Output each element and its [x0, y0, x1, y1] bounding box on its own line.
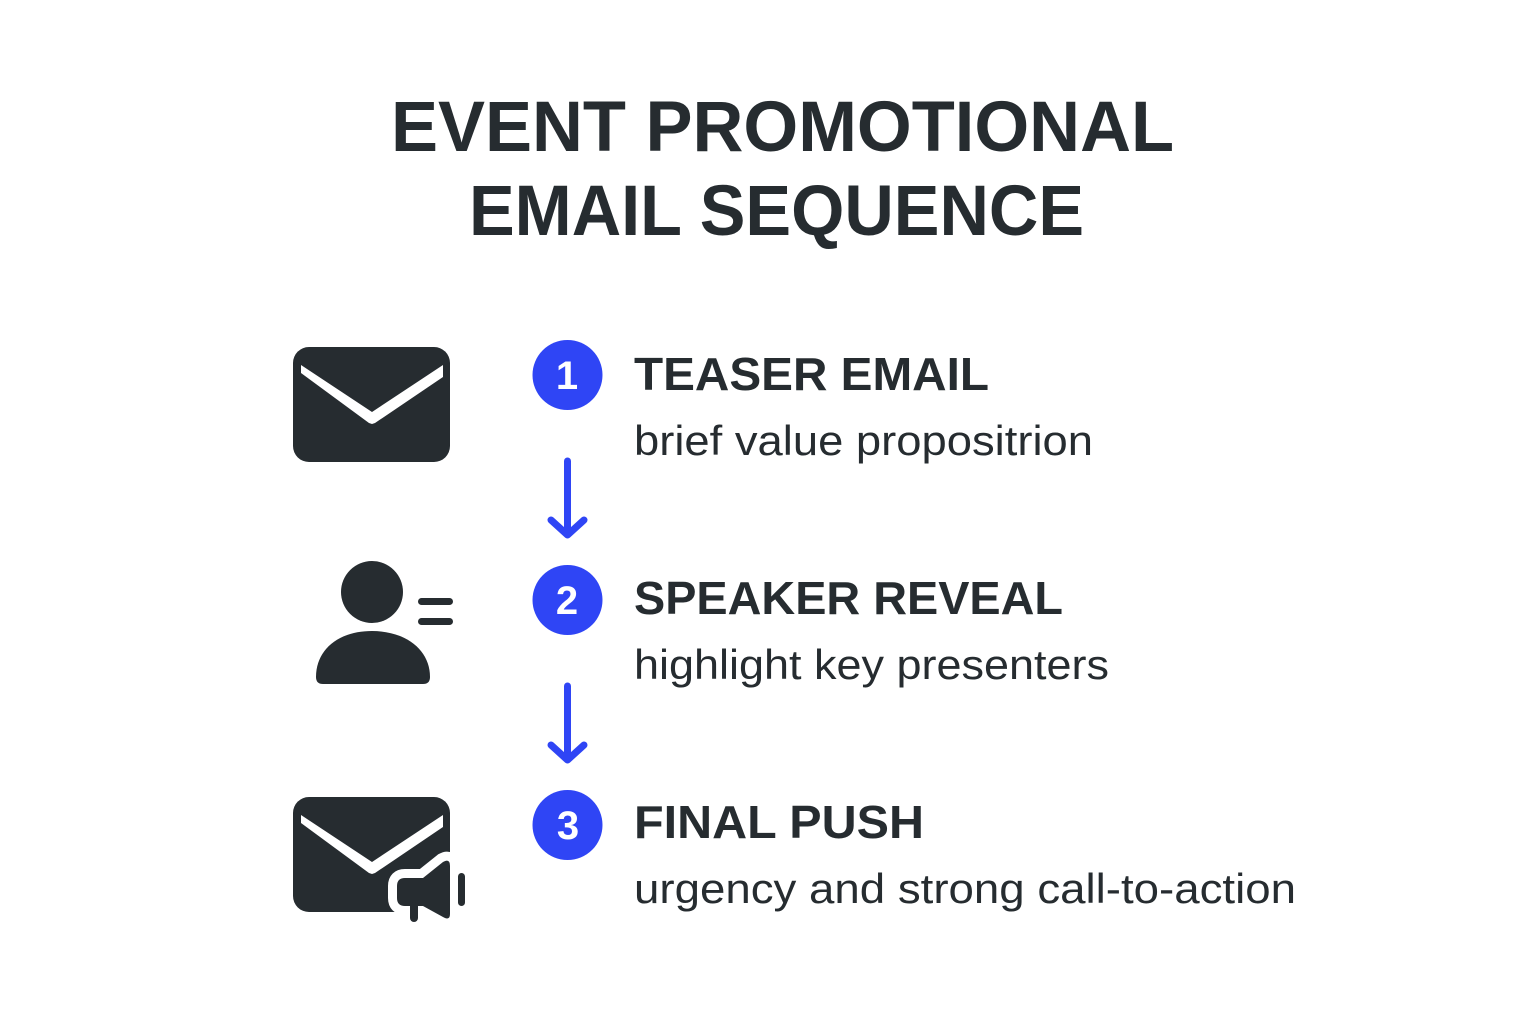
icon: envelope with megaphone: [293, 797, 471, 925]
step 1 heading: TEASER EMAIL: [634, 348, 989, 400]
title: EMAIL SEQUENCE: [469, 172, 1084, 251]
step 3 badge: [532, 790, 602, 860]
step 3 description: urgency and strong call-to-action: [634, 865, 1296, 912]
step 1 badge: [532, 340, 602, 410]
step 2 heading: SPEAKER REVEAL: [634, 572, 1063, 624]
step 3 heading: FINAL PUSH: [634, 796, 924, 848]
arrow: step 2 to step 3: [551, 686, 584, 760]
step 3 badge: 3: [557, 804, 579, 848]
title: EVENT PROMOTIONAL: [391, 88, 1174, 167]
arrow: step 1 to step 2: [551, 461, 584, 535]
step 1 badge: 1: [556, 354, 578, 398]
icon: envelope: [293, 347, 450, 462]
title: [391, 88, 1174, 251]
step 2 badge: 2: [556, 579, 578, 623]
step 2 badge: [532, 565, 602, 635]
step 2 description: highlight key presenters: [634, 641, 1109, 688]
step 1 description: brief value propositrion: [634, 417, 1093, 464]
icon: speaker profile: [316, 561, 453, 684]
